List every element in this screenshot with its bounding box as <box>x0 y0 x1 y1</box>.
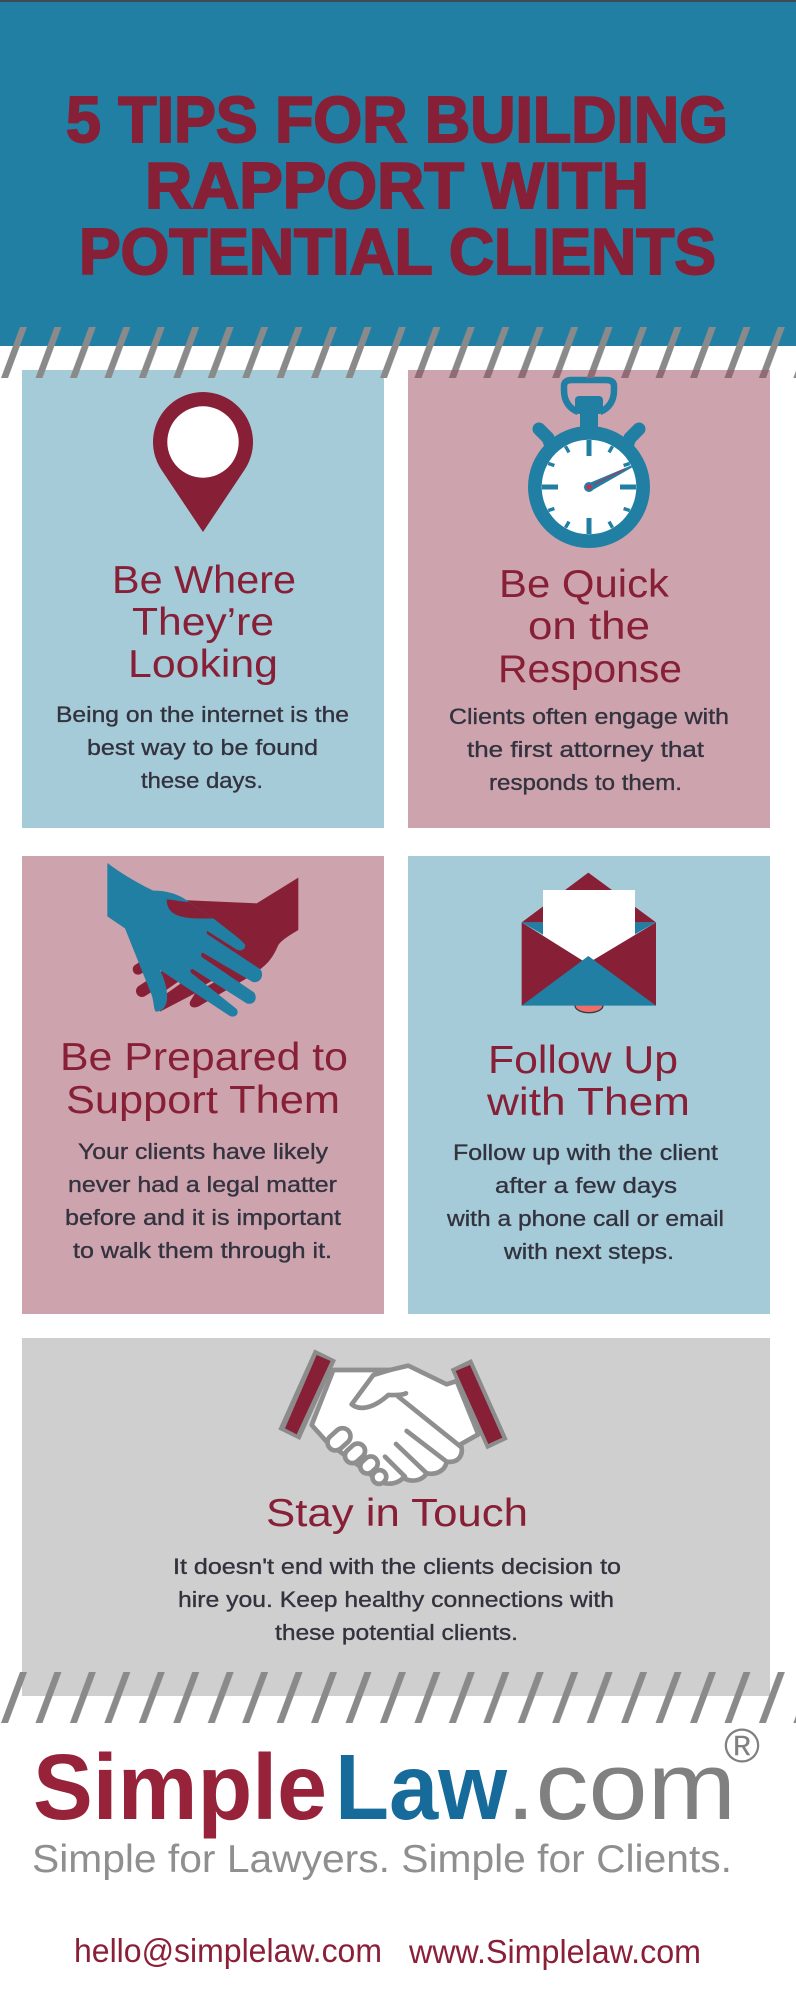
text: stay in touch: these potential clients. <box>275 1620 518 1645</box>
text: be where they're looking <box>56 702 349 793</box>
panel: stay in touch <box>22 1338 770 1696</box>
text: be where they're looking: Being on the internet is the <box>56 702 349 727</box>
header banner <box>0 0 796 346</box>
text: follow up with them: with a phone call or email <box>446 1206 724 1231</box>
heading: follow up with them: with Them <box>486 1081 690 1124</box>
heading: be where they're looking: They’re <box>132 601 274 644</box>
heading: be quick on the response: Response <box>498 648 682 691</box>
logo: SimpleLaw.com: .com <box>506 1733 736 1840</box>
registered mark: ® <box>724 1720 760 1773</box>
icon: helping hands <box>107 863 298 1017</box>
heading: be where they're looking <box>112 559 296 686</box>
logo: SimpleLaw.com <box>33 1720 760 1840</box>
text: be where they're looking: these days. <box>141 768 263 793</box>
text: follow up with them: after a few days <box>495 1173 677 1198</box>
icon: stopwatch <box>528 380 650 548</box>
text: be quick on the response: the first attorney that <box>467 737 704 762</box>
heading: be prepared to support them: Be Prepared to <box>60 1036 348 1079</box>
text: follow up with them: with next steps. <box>503 1239 674 1264</box>
text: stay in touch <box>173 1554 621 1645</box>
heading: be where they're looking: Be Where <box>112 559 296 602</box>
text: be quick on the response: Clients often engage with <box>449 704 729 729</box>
tagline: Simple for Lawyers. Simple for Clients. <box>32 1838 732 1881</box>
text: follow up with them <box>446 1140 724 1264</box>
heading: be quick on the response: Be Quick <box>499 563 670 606</box>
text: stay in touch: It doesn't end with the clients decision to <box>173 1554 621 1579</box>
title: 5 TIPS FOR BUILDING <box>66 83 728 156</box>
text: be prepared to support them: to walk them through it. <box>73 1238 332 1263</box>
heading: follow up with them: Follow Up <box>488 1039 678 1082</box>
panel: follow up with them <box>408 856 770 1314</box>
panel: be quick on the response <box>408 370 770 828</box>
text: follow up with them: Follow up with the client <box>453 1140 718 1165</box>
heading: stay in touch: Stay in Touch <box>266 1492 528 1535</box>
contact: email: hello@simplelaw.com <box>74 1932 382 1969</box>
panel: be prepared to support them <box>22 856 384 1314</box>
heading: follow up with them <box>486 1039 690 1124</box>
heading: be prepared to support them <box>60 1036 348 1122</box>
heading: be quick on the response <box>498 563 682 691</box>
contact: website: www.Simplelaw.com <box>408 1933 701 1970</box>
text: be where they're looking: best way to be found <box>87 735 318 760</box>
logo: SimpleLaw.com: Law <box>335 1735 508 1839</box>
logo: SimpleLaw.com: Simple <box>33 1735 327 1839</box>
title: POTENTIAL CLIENTS <box>79 215 716 288</box>
panel: be where they're looking <box>22 370 384 828</box>
text: be prepared to support them <box>65 1139 341 1263</box>
text: be prepared to support them: Your clients have likely <box>78 1139 328 1164</box>
text: be prepared to support them: never had a legal matter <box>68 1172 337 1197</box>
text: be quick on the response: responds to them. <box>489 770 682 795</box>
heading: be where they're looking: Looking <box>128 643 278 686</box>
title <box>66 83 728 288</box>
text: be prepared to support them: before and it is important <box>65 1205 341 1230</box>
text: be quick on the response <box>449 704 729 795</box>
icon: handshake <box>278 1349 508 1487</box>
heading: be prepared to support them: Support Them <box>66 1079 340 1122</box>
icon: open envelope with letter <box>522 873 656 1013</box>
heading: be quick on the response: on the <box>528 605 650 648</box>
icon: map pin <box>153 392 253 532</box>
title: RAPPORT WITH <box>145 149 649 222</box>
text: stay in touch: hire you. Keep healthy connections with <box>178 1587 614 1612</box>
